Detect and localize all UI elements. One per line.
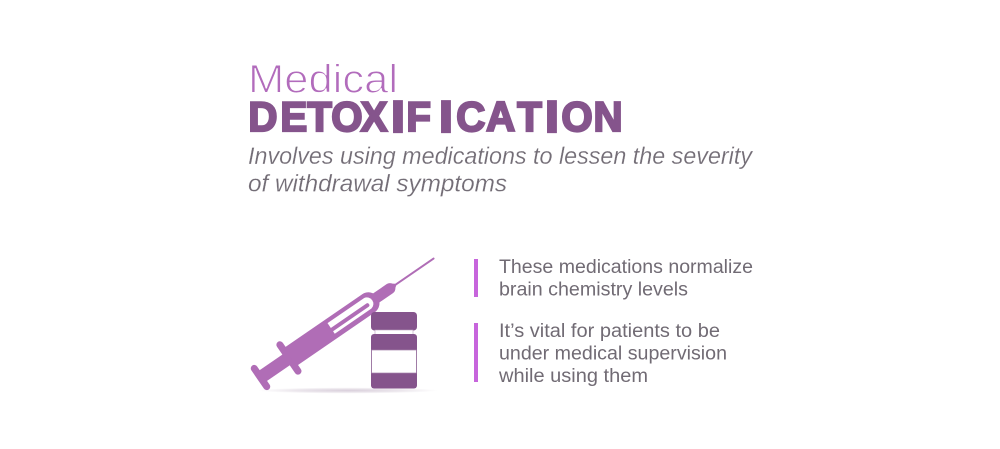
heading: Detoxification: DETOXIFICATION	[248, 93, 623, 140]
bullet: first point	[474, 257, 753, 301]
title: Medical: Medical	[248, 58, 398, 102]
bullet text: while using them	[498, 366, 648, 387]
icon: syringe and vial	[247, 242, 445, 396]
bullet text: It’s vital for patients to be	[499, 321, 720, 342]
bullet text: These medications normalize	[499, 257, 753, 278]
subtitle: of withdrawal symptoms	[248, 171, 507, 198]
vial cap	[371, 312, 417, 330]
vial label	[372, 350, 416, 373]
bullet: second point	[474, 321, 727, 387]
vial neck	[375, 330, 413, 335]
bullet text	[498, 321, 727, 387]
subtitle	[248, 143, 754, 198]
vial body	[371, 334, 417, 388]
icon: syringe	[247, 242, 445, 396]
ground shadow	[258, 388, 438, 394]
bullet text	[499, 257, 753, 301]
accent bar	[474, 323, 478, 382]
bullet text: brain chemistry levels	[499, 280, 688, 301]
subtitle: Involves using medications to lessen the severity	[248, 143, 754, 170]
icon: vial	[371, 312, 417, 388]
accent bar	[474, 259, 478, 297]
bullet text: under medical supervision	[499, 343, 727, 364]
